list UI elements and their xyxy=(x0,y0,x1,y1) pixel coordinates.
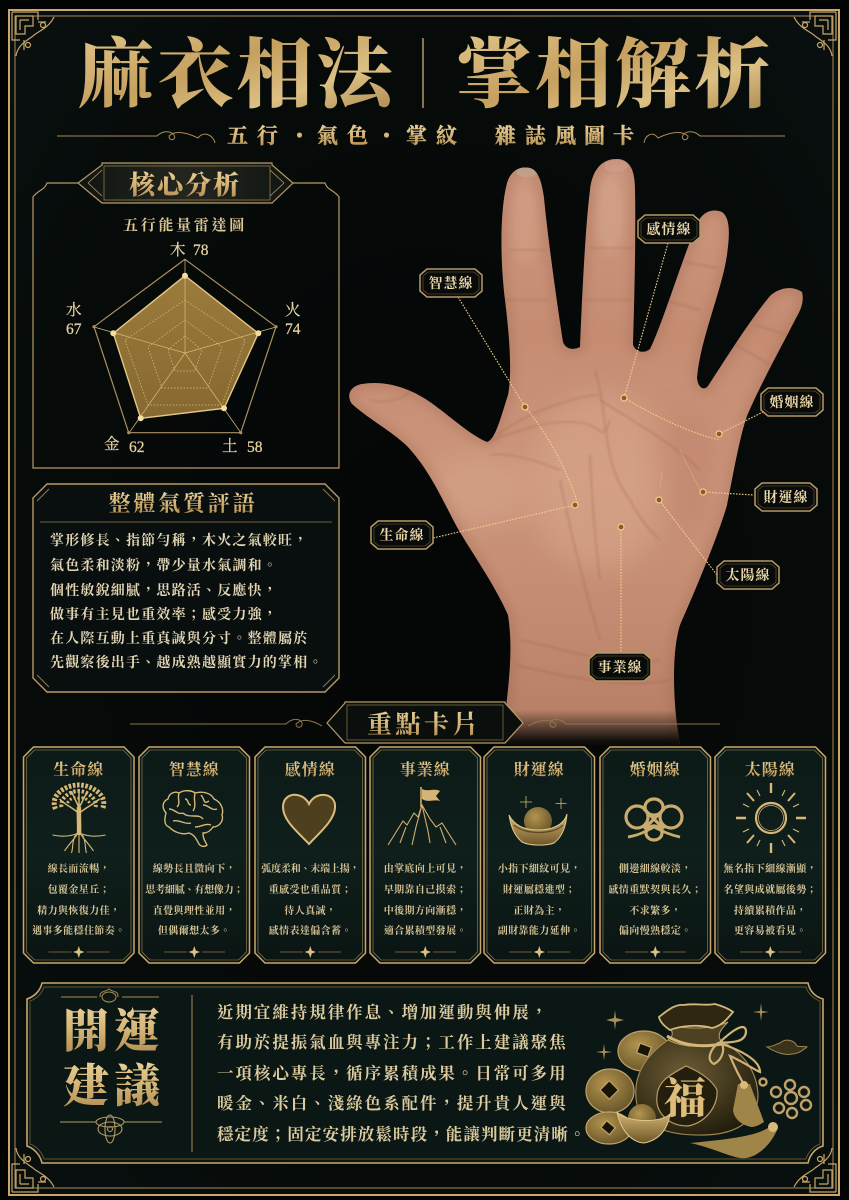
card: love line xyxy=(255,747,366,963)
card: wisdom line: 但偶爾想太多。 xyxy=(158,922,231,937)
card: wisdom line: 線勢長且微向下， xyxy=(153,860,236,875)
badge: core analysis heading: 核心分析 xyxy=(129,165,241,202)
card: wealth line: 財運屬穩進型； xyxy=(503,881,576,896)
card: wealth line: 財運線 xyxy=(514,757,565,780)
gold ingot xyxy=(617,1104,670,1143)
label: life line xyxy=(371,521,433,549)
card: love line: 重感受也重品質； xyxy=(269,881,352,896)
ornament: bottom knot xyxy=(60,1115,162,1143)
radar value labels: 58 xyxy=(247,439,263,456)
radar value labels: 水 xyxy=(66,298,82,320)
advice body text: 暖金、米白、淺綠色系配件，提升貴人運與 xyxy=(217,1090,568,1114)
icon: gold ingot xyxy=(509,796,567,845)
label: wisdom line xyxy=(420,269,482,297)
advice body text: 有助於提振氣血與專注力；工作上建議聚焦 xyxy=(217,1029,568,1053)
card: wisdom line: 思考細膩、有想像力； xyxy=(145,881,243,896)
palm line marker dots xyxy=(522,395,722,530)
card: life line: 遇事多能穩住節奏。 xyxy=(32,922,126,937)
card: love line: 感情線 xyxy=(285,757,336,780)
card: marriage line: 不求繁多， xyxy=(629,902,681,917)
ornament: top xyxy=(61,989,159,1002)
card: love line: 待人真誠， xyxy=(284,902,336,917)
advice heading xyxy=(63,995,165,1116)
label: love line xyxy=(638,215,700,243)
subtitle with flourishes: 五行・氣色・掌紋 xyxy=(227,120,457,150)
card: wealth line: 正財為主， xyxy=(513,902,565,917)
advice body text xyxy=(217,999,587,1145)
panel body text: 先觀察後出手、越成熟越顯實力的掌相。 xyxy=(50,652,324,672)
subtitle with flourishes xyxy=(57,120,785,150)
tassels and knot xyxy=(690,1078,811,1158)
radar value labels: 木 xyxy=(170,238,186,260)
card: life line: 精力與恢復力佳， xyxy=(37,902,120,917)
panel body text: 做事有主見也重效率；感受力強， xyxy=(50,604,278,624)
icon: brain xyxy=(163,791,223,846)
bag ribbon xyxy=(710,1027,760,1086)
card: career line: 中後期方向漸穩， xyxy=(384,902,467,917)
section heading: key cards xyxy=(130,702,720,743)
icon: tree xyxy=(52,785,106,853)
card: marriage line: 偏向慢熟穩定。 xyxy=(619,922,692,937)
radar value labels: 土 xyxy=(222,434,238,456)
radar value labels: 火 xyxy=(285,298,301,320)
advice body text: 近期宜維持規律作息、增加運動與伸展， xyxy=(217,999,549,1023)
panel body text: 在人際互動上重真誠與分寸。整體屬於 xyxy=(50,628,308,648)
label: sun line xyxy=(717,561,779,589)
radar value labels: 62 xyxy=(129,439,144,456)
bag emblem and fu character: 福 xyxy=(664,1066,706,1126)
label: career line xyxy=(589,653,651,681)
card: sun line: 名望與成就屬後勢； xyxy=(723,881,817,896)
radar chart xyxy=(92,259,278,434)
card: wealth line: 副財靠能力延伸。 xyxy=(498,922,581,937)
subtitle with flourishes: 雜誌風圖卡 xyxy=(495,120,634,150)
title: 掌相解析 xyxy=(456,14,774,123)
radar value labels: 74 xyxy=(285,321,301,338)
panel: core analysis radar xyxy=(33,163,339,468)
panel body text: 個性敏銳細膩，思路活、反應快， xyxy=(50,580,278,600)
advice body text: 穩定度；固定安排放鬆時段，能讓判斷更清晰。 xyxy=(217,1121,587,1145)
icon: heart xyxy=(283,795,335,844)
panel body text xyxy=(50,530,324,672)
card: sun line: 無名指下細線漸顯， xyxy=(723,860,817,875)
radar value labels xyxy=(66,238,301,456)
title: 麻衣相法 xyxy=(78,14,400,123)
radar value labels: 78 xyxy=(193,242,209,259)
label: wisdom line: 智慧線 xyxy=(428,273,474,293)
card: wisdom line: 直覺與理性並用， xyxy=(153,902,236,917)
radar value labels: 金 xyxy=(104,432,120,454)
card: marriage line: 婚姻線 xyxy=(630,757,681,780)
bag body xyxy=(636,1040,758,1135)
card: marriage line xyxy=(600,747,710,963)
card: love line: 感情表達偏含蓄。 xyxy=(269,922,352,937)
gold coins xyxy=(586,1031,670,1144)
card: marriage line: 側邊細線較淡， xyxy=(619,860,692,875)
advice body text: 一項核心專長，循序累積成果。日常可多用 xyxy=(217,1060,568,1084)
icon: mountain with flag xyxy=(388,787,456,845)
card: sun line: 持續累積作品， xyxy=(734,902,807,917)
card: wealth line: 小指下細紋可見， xyxy=(498,860,581,875)
panel body text: 掌形修長、指節勻稱，木火之氣較旺， xyxy=(50,530,308,550)
label: love line: 感情線 xyxy=(646,219,692,239)
palm line dotted leaders xyxy=(433,243,763,652)
bag emblem and fu character xyxy=(657,1066,717,1126)
icon: sun xyxy=(736,783,806,853)
illustration: lucky money bag xyxy=(586,1003,811,1158)
card: life line xyxy=(24,747,134,963)
card: career line: 早期靠自己摸索； xyxy=(384,881,467,896)
card: career line: 由掌底向上可見， xyxy=(384,860,467,875)
radar subtitle: 五行能量雷達圖 xyxy=(123,214,247,235)
card: wisdom line: 智慧線 xyxy=(169,757,220,780)
advice heading: 建議 xyxy=(63,1050,165,1116)
icon: endless knot xyxy=(626,799,682,840)
label: marriage line xyxy=(761,388,823,416)
label: sun line: 太陽線 xyxy=(726,565,770,585)
card: wealth line xyxy=(484,747,594,963)
title xyxy=(78,14,774,123)
card: marriage line: 感情重默契與長久； xyxy=(608,881,702,896)
card: life line: 生命線 xyxy=(53,757,104,780)
card: sun line: 太陽線 xyxy=(745,757,796,780)
label: marriage line: 婚姻線 xyxy=(770,392,814,412)
hand photo illustration xyxy=(349,159,803,748)
radar value labels: 67 xyxy=(66,321,82,338)
advice heading: 開運 xyxy=(63,995,165,1061)
panel body text: 氣色柔和淡粉，帶少量水氣調和。 xyxy=(50,555,278,575)
card: sun line: 更容易被看見。 xyxy=(734,922,807,937)
badge: core analysis heading xyxy=(78,163,293,203)
label: career line: 事業線 xyxy=(598,657,642,677)
panel heading: 整體氣質評語 xyxy=(109,487,257,518)
card: life line: 線長而流暢， xyxy=(48,860,110,875)
label: wealth line: 財運線 xyxy=(764,487,808,507)
section heading: key cards: 重點卡片 xyxy=(367,705,481,741)
card: wisdom line xyxy=(139,747,250,963)
label: life line: 生命線 xyxy=(380,525,424,545)
card: life line: 包覆金星丘； xyxy=(48,881,110,896)
label: wealth line xyxy=(755,483,817,511)
card: career line xyxy=(370,747,480,963)
card: love line: 弧度柔和、末端上揚， xyxy=(261,860,359,875)
card: career line: 適合累積型發展。 xyxy=(384,922,467,937)
card: career line: 事業線 xyxy=(400,757,451,780)
panel: overall temperament comment xyxy=(33,484,339,692)
panel: fortune advice xyxy=(27,983,823,1163)
card: sun line xyxy=(715,747,826,963)
